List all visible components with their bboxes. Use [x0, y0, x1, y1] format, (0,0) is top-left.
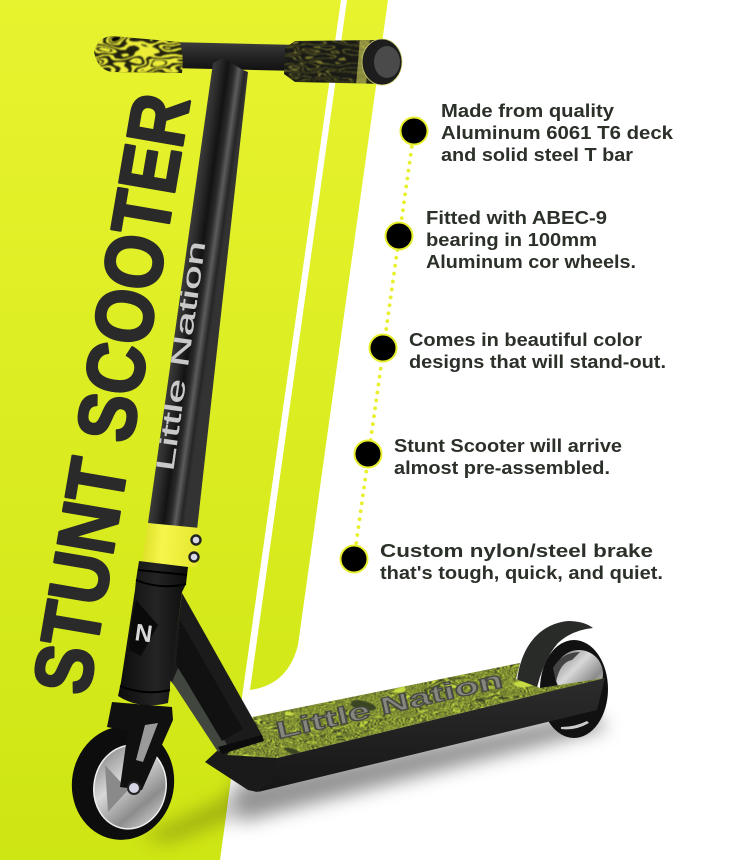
feature 5: that's tough, quick, and quiet. [380, 563, 663, 583]
feature 1: Aluminum 6061 T6 deck [441, 123, 674, 143]
front fork [107, 702, 173, 794]
feature 1 [400, 101, 674, 165]
stem tube [148, 58, 248, 530]
feature 5: Custom nylon/steel brake [380, 541, 653, 561]
left green panel [0, 0, 341, 860]
handlebar bar [170, 42, 300, 71]
rear fender [517, 621, 593, 692]
title: Stunt Scooter: STUNT SCOOTER [17, 88, 208, 700]
feature 4: almost pre-assembled. [394, 458, 610, 478]
feature 2: Aluminum cor wheels. [426, 252, 636, 272]
feature 2 [386, 208, 636, 272]
head tube [118, 561, 188, 705]
ground shadow [140, 712, 608, 842]
stem logo: Little Nation [151, 239, 211, 473]
feature timeline [340, 101, 674, 583]
feature 5 [340, 541, 663, 583]
rear wheel [540, 640, 608, 738]
deck logo: Little Nation [273, 666, 505, 745]
deck nose end [205, 750, 277, 792]
feature 2: Fitted with ABEC-9 [426, 208, 607, 228]
right grip [284, 40, 375, 84]
feature 3: Comes in beautiful color [409, 330, 642, 350]
feature 2: bearing in 100mm [426, 230, 597, 250]
feature 1: and solid steel T bar [441, 145, 633, 165]
deck side [258, 678, 605, 792]
feature 4 [354, 436, 622, 478]
feature 3 [370, 330, 666, 372]
grip end cap [362, 39, 402, 85]
scooter illustration [63, 30, 620, 848]
front wheel [63, 718, 183, 848]
down tube [170, 593, 264, 754]
dotted connector [354, 131, 414, 559]
yellow seat clamp [142, 523, 200, 567]
deck top surface [227, 663, 604, 758]
feature 3: designs that will stand-out. [409, 352, 666, 372]
head tube logo: N [133, 619, 154, 648]
left grip [94, 36, 183, 73]
feature 1: Made from quality [441, 101, 614, 121]
green diagonal strip [250, 0, 388, 690]
feature 4: Stunt Scooter will arrive [394, 436, 622, 456]
